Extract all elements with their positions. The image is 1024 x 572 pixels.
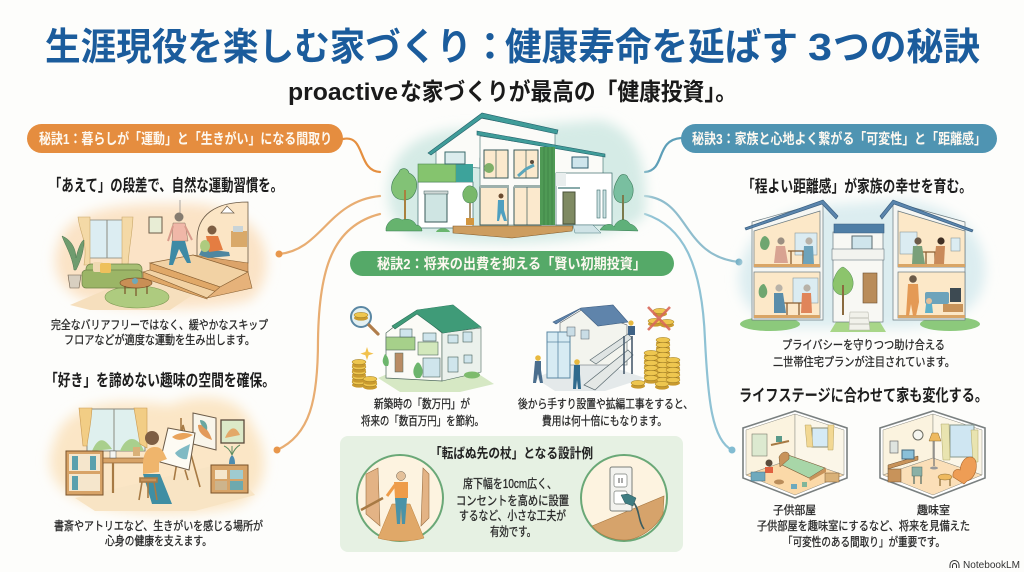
illustration: central house [386, 113, 646, 243]
connectors: orange [274, 139, 380, 454]
title: つの秘訣 [833, 27, 980, 69]
illustration: hobby room [880, 411, 985, 498]
title [45, 27, 980, 69]
text: new-build caption: 新築時の「数万円」が [374, 396, 470, 411]
label: hobby room: 趣味室 [917, 503, 950, 517]
illustration: costly retrofit with coins [533, 305, 680, 391]
text: retrofit caption: 費用は何十倍にもなります。 [542, 413, 667, 428]
pill heading: secret 1 [27, 124, 343, 153]
text: design example description: するなど、小さな工夫が [459, 508, 566, 523]
panel: secret 3 [681, 124, 997, 549]
panel: secret 2 illustrations [351, 305, 693, 428]
subtitle: proactive [288, 79, 398, 106]
title: 3 [808, 27, 832, 69]
illustration: two-generation house [739, 200, 985, 332]
text: steps caption: フロアなどが適度な運動を生み出します。 [64, 332, 255, 347]
illustration: hobby atelier [50, 397, 264, 514]
connectors: blue [645, 138, 742, 454]
pill heading: secret 2 [350, 251, 674, 276]
text: design example description [456, 476, 569, 539]
heading: design examples: 「転ばぬ先の杖」となる設計例 [430, 445, 593, 461]
label: child room: 子供部屋 [773, 503, 816, 517]
subtitle [288, 78, 737, 106]
illustration: child room [743, 411, 847, 498]
illustration: skip floor living room [55, 200, 266, 310]
panel: design examples [340, 436, 683, 552]
text: new-build caption [361, 396, 484, 428]
icon: wide corridor [357, 455, 443, 541]
text: flexibility caption: 子供部屋を趣味室にするなど、将来を見備えた [757, 518, 970, 533]
title: ： [471, 27, 509, 69]
text: retrofit caption [518, 397, 693, 428]
subtitle: な家づくりが最高の「健康投資」。 [400, 78, 737, 106]
text: new-build caption: 将来の「数百万円」を節約。 [361, 413, 484, 428]
icon: raised outlet [581, 455, 667, 541]
heading: hobby: 「好き」を諦めない趣味の空間を確保。 [45, 371, 275, 390]
text: steps caption: 完全なバリアフリーではなく、緩やかなスキップ [51, 318, 268, 332]
logo: NotebookLM: NotebookLM [963, 559, 1020, 571]
text: retrofit caption: 後から手すり設置や拡編工事をすると、 [518, 397, 693, 411]
text: design example description: 席下幅を10cm広く、 [463, 476, 557, 491]
text: hobby caption: 書斎やアトリエなど、生きがいを感じる場所が [54, 518, 263, 533]
text: design example description: コンセントを高めに設置 [456, 493, 569, 508]
pill heading: secret 2: 秘訣2：将来の出費を抑える「賢い初期投資」 [377, 255, 646, 273]
text: steps caption [51, 318, 268, 347]
title: 健康寿命を延ばす [505, 27, 798, 69]
text: two-generation caption [773, 338, 955, 369]
text: design example description: 有効です。 [490, 525, 536, 539]
text: hobby caption: 心身の健康を支えます。 [105, 533, 212, 548]
text: hobby caption [54, 518, 263, 548]
title: 生涯現役を楽しむ家づくり [45, 27, 472, 69]
text: flexibility caption [757, 518, 970, 549]
panel: secret 1 [27, 124, 343, 548]
text: flexibility caption: 「可変性のある間取り」が重要です。 [783, 534, 945, 549]
pill heading: secret 1: 秘訣1：暮らしが「運動」と「生きがい」になる間取り [39, 130, 332, 148]
heading: steps: 「あえて」の段差で、自然な運動習慣を。 [49, 175, 283, 195]
text: two-generation caption: 二世帯住宅プランが注目されています。 [773, 354, 955, 369]
illustration: new house with coins [351, 305, 494, 392]
text: two-generation caption: プライバシーを守りつつ助け合える [782, 338, 945, 352]
pill heading: secret 3 [681, 124, 997, 153]
